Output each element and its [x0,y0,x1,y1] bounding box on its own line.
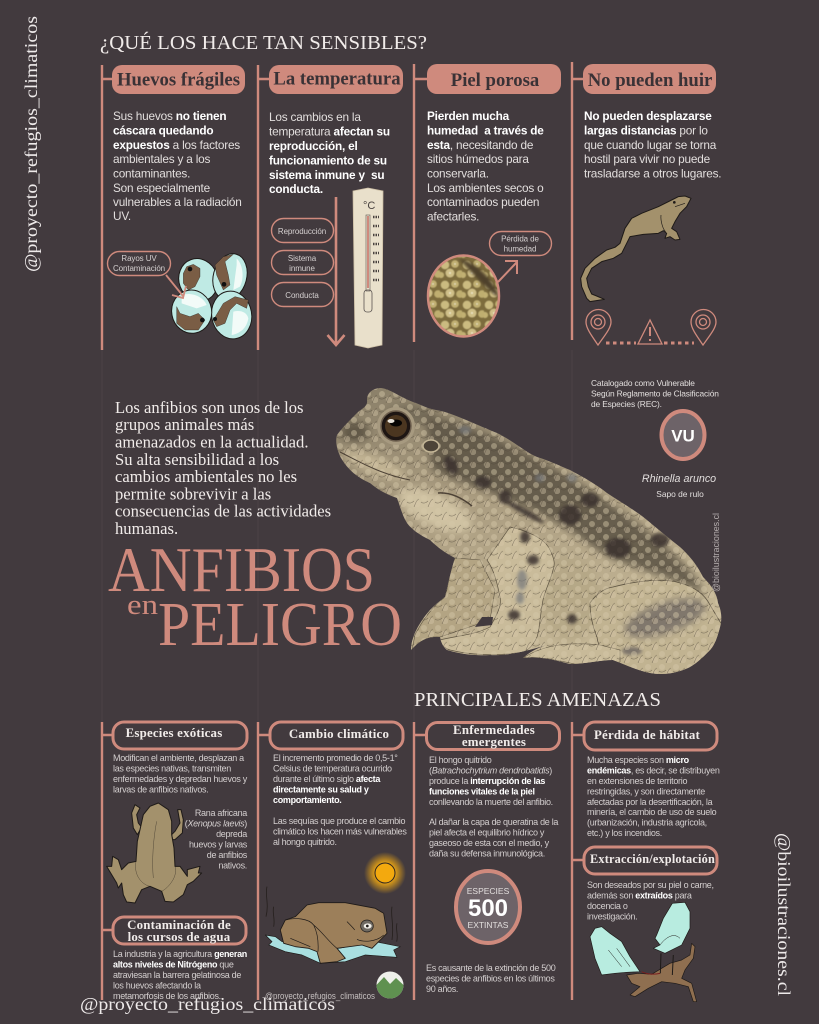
text: extracción: investigación. [587,912,637,922]
text: piel: conservarla. [427,166,489,180]
label: reproducción [272,218,334,242]
text: huevos: Son especialmente [113,181,211,195]
text: hongo quitrido: funciones vitales de la piel [429,786,535,796]
text: pérdida de hábitat [587,755,720,838]
illustration: sapo sobre charco seco [265,887,400,963]
arrow: pérdida [498,261,517,282]
heading: enfermedades emergentes: Enfermedades [453,723,535,737]
text: temperatura: Los cambios en la [269,110,361,124]
icon: termómetro: °C [363,200,375,212]
toad warts [330,380,730,680]
text: huir: hostil para vivir no puede [584,152,711,166]
icon: ruta bloqueada [586,310,716,345]
label: pérdida de humedad [490,232,552,256]
text: rana africana: nativos. [218,860,247,870]
heading: la temperatura: La temperatura [273,68,401,90]
text: huir: que cuando lugar se torna [584,138,717,152]
text: extinción: Es causante de la extinción de 500 [426,963,556,973]
icon: rana saltando [581,196,691,302]
text: piel: afectarles. [427,210,479,224]
badge: 500 especies extintas: EXTINTAS [468,920,509,930]
label: rayos UV contaminación: Contaminación [113,264,165,273]
text: hongo quitrido [429,755,558,858]
panel: huevos frágiles [102,65,256,350]
text: piel: sitios húmedos para [427,152,529,166]
title: anfibios en peligro: ANFIBIOS [108,534,375,605]
text: temperatura: reproducción, el [269,139,358,153]
text: huevos: ambientales y a los [113,152,210,166]
text: extinción: 90 años. [426,984,458,994]
title: anfibios en peligro: en [127,589,159,621]
text: huevos: Sus huevos no tienen [113,109,226,123]
text: cambio climático: climático los hacen más vulnerables [273,826,407,836]
text: temperatura: conducta. [269,182,323,196]
heading: contaminación de los cursos de agua [113,917,246,944]
text: extracción: docencia o [587,901,628,911]
text: rana africana: (Xenopus laevis) [185,818,247,828]
watermark: proyecto vertical: @proyecto_refugios_climaticos [21,16,41,272]
badge: 500 especies extintas: 500 [468,895,508,922]
text: huevos: vulnerables a la radiación [113,195,242,209]
panel: pérdida de hábitat y extracción [572,722,720,1002]
text: especies exóticas: Modifican el ambiente, desplazan a [113,753,244,763]
mouth and parotoid details [340,452,472,506]
heading: contaminación de los cursos de agua: Contaminación de [127,918,231,932]
text: piel: Los ambientes secos o [427,181,544,195]
watermark: proyecto inferior: @proyecto_refugios_climaticos [80,994,335,1014]
title: anfibios en peligro [108,534,402,659]
text: cambio climático: al hongo quitrido. [273,837,337,847]
text: cambio climático: Celsius de temperatura ocurrido [273,764,392,774]
heading: no pueden huir: No pueden huir [588,70,712,91]
heading: enfermedades emergentes [426,722,560,750]
text: temperatura: temperatura afectan su [269,124,390,138]
heading: extracción/explotación: Extracción/explotación [590,852,715,866]
text: contaminación [113,949,247,1001]
text: cambio climático: durante el último siglo afecta [273,774,381,784]
text: pérdida de hábitat: restringidas, y son directamente [587,786,705,796]
heading: especies exóticas: Especies exóticas [126,726,222,740]
text: rana africana: depreda [216,829,247,839]
text: pérdida de hábitat: Mucha especies son micro [587,755,690,765]
panel: enfermedades emergentes [414,722,560,1000]
badge: 500 especies extintas: ESPECIES [467,886,510,896]
panel: especies exóticas y contaminación [102,722,248,1001]
text: extinción [426,963,556,994]
text: huevos: UV. [113,209,131,223]
label: rayos UV contaminación: Rayos UV [121,254,157,263]
heading: no pueden huir [583,64,716,94]
badge: VU [662,411,704,459]
text: rana africana [185,808,248,870]
logo: refugios climáticos [376,972,404,999]
text: extracción [587,880,714,922]
text: introducción: consecuencias de las actividades [115,502,331,520]
panel: piel porosa [414,64,561,342]
panel: no pueden huir [572,62,721,345]
label: pérdida de humedad: humedad [504,244,536,254]
heading: huevos frágiles [112,65,245,94]
text: extracción: Son deseados por su piel o carne, [587,880,714,890]
text: contaminación: La industria y la agricultura generan [113,949,247,959]
text: introducción [115,398,331,538]
text: introducción: humanas. [115,519,178,538]
heading: pérdida de hábitat: Pérdida de hábitat [594,728,701,742]
text: temperatura: funcionamiento de su [269,154,387,168]
text: piel: contaminados pueden [427,195,539,209]
heading: extracción/explotación [584,847,717,874]
label: conducta [272,282,334,306]
text: pérdida de hábitat: en extensiones de territorio [587,776,687,786]
text: rana africana: de anfibios [207,850,248,860]
text: contaminación: altos niveles de Nitrógeno que [113,960,234,970]
heading: cambio climático [270,722,403,749]
text: temperatura: sistema inmune y su [269,168,384,182]
text: huir [584,109,721,180]
text: cambio climático: directamente su salud y [273,784,369,794]
arrow: descenso [328,197,344,345]
illustration: sapo Rhinella arunco [330,380,730,680]
text: cambio climático: Las sequías que produce el cambio [273,816,405,826]
text: nombre de especie: Rhinella arunco [642,473,716,485]
panel: cambio climático [258,722,407,1001]
text: piel: humedad a través de [427,124,544,138]
heading: cambio climático: Cambio climático [289,727,389,741]
label: reproducción: Reproducción [278,227,326,236]
text: cambio climático [273,753,407,847]
text: piel [427,109,544,224]
icon: sol [364,852,406,894]
text: especies exóticas: enfermedades y depredan huevos y [113,774,248,784]
text: pérdida de hábitat: afectadas por la desertificación, la [587,797,713,807]
back foreleg [412,558,495,650]
label: rayos UV contaminación [108,252,170,276]
text: temperatura [269,110,390,196]
text: introducción: Su alta sensibilidad a los [115,450,279,469]
text: estado de conservación: Según Reglamento de Clasificación [591,388,719,398]
text: estado de conservación [591,378,719,409]
illustration: manos con guantes y anfibio [590,902,697,1002]
text: huevos [113,109,242,223]
icon: huevos [168,250,256,342]
text: pérdida de hábitat: etc.) y los incendios. [587,828,662,838]
credit: bioilustraciones: @bioilustraciones.cl [711,513,721,592]
text: contaminación: los huevos afectando la [113,980,201,990]
label: sistema inmune: Sistema [288,254,317,263]
text: especies exóticas: las especies nativas, transmiten [113,764,231,774]
text: especies exóticas [113,753,248,794]
text: cambio climático: comportamiento. [273,795,342,805]
label: pérdida de humedad: Pérdida de [501,234,539,244]
text: hongo quitrido: piel afecta el equilibrio hídrico y [429,828,545,838]
text: piel: esta, necesitando de [427,138,534,152]
arrow: rayos UV a huevos [166,275,186,298]
text: nombre de especie [642,473,716,499]
heading: la temperatura [269,65,403,94]
front arm [440,527,554,655]
icon: rana africana [107,803,202,903]
icon: termómetro [353,188,383,348]
text: introducción: amenazados en la actualidad. [115,432,308,452]
text: extracción: además son extraídos para [587,890,692,900]
heading: contaminación de los cursos de agua: los cursos de agua [128,930,231,944]
text: contaminación: metamorfosis de los anfibios.. [113,991,223,1001]
text: contaminación: atraviesan la barrera gelatinosa de [113,970,241,980]
text: hongo quitrido: (Batrachochytrium dendrobatidis) [429,766,552,776]
text: nombre de especie: Sapo de rulo [656,489,704,499]
text: especies exóticas: larvas de anfibios nativos. [113,784,208,794]
text: pérdida de hábitat: (urbanización, industria agrícola, [587,818,707,828]
rear foot [523,644,620,664]
badge: 500 especies extintas [456,871,520,943]
rear thigh and leg [590,580,725,680]
text: huevos: expuestos a los factores [113,138,240,152]
text: pérdida de hábitat: minería, el cambio de uso de suelo [587,807,717,817]
text: introducción: grupos animales más [115,415,254,434]
heading: enfermedades emergentes: emergentes [462,735,526,749]
text: rana africana: Rana africana [195,808,247,818]
text: pérdida de hábitat: endémicas, es decir, se distribuyen [587,766,720,776]
heading: piel porosa [427,64,561,94]
text: estado de conservación: de Especies (REC). [591,399,662,409]
heading: huevos frágiles: Huevos frágiles [117,70,240,90]
text: rana africana: huevos y larvas [189,840,248,850]
heading: piel porosa: Piel porosa [451,70,540,91]
text: hongo quitrido: produce la interrupción de las [429,776,545,786]
text: hongo quitrido: Al dañar la capa de queratina de la [429,817,558,827]
label: sistema inmune [272,250,334,274]
panel: la temperatura [258,65,403,350]
text: estado de conservación: Catalogado como Vulnerable [591,378,695,388]
text: huir: largas distancias por lo [584,124,708,138]
icon: piel porosa [425,252,503,340]
text: introducción: Los anfibios son unos de los [115,398,304,417]
eye [377,407,415,445]
title: qué los hace tan sensibles: ¿QUÉ LOS HACE TAN SENSIBLES? [100,31,427,54]
credit: proyecto refugios climáticos pequeño: @proyecto_refugios_climaticos [265,991,375,1001]
text: huir: trasladarse a otros lugares. [584,166,721,180]
text: introducción: permite sobrevivir a las [115,484,271,504]
text: huevos: cáscara quedando [113,124,213,138]
text: hongo quitrido: El hongo quitrido [429,755,492,765]
heading: especies exóticas [113,722,247,749]
text: huir: No pueden desplazarse [584,109,712,123]
text: extinción: especies de anfibios en los últimos [426,974,555,984]
text: introducción: cambios ambientales no les [115,467,297,486]
heading: principales amenazas: PRINCIPALES AMENAZAS [414,689,661,711]
text: piel: Pierden mucha [427,109,510,123]
text: cambio climático: El incremento promedio de 0,5-1° [273,753,398,763]
watermark: bioilustraciones vertical: @bioilustraciones.cl [774,833,794,996]
title: anfibios en peligro: PELIGRO [158,591,402,659]
label: conducta: Conducta [285,291,319,300]
text: hongo quitrido: daña su defensa inmunológica. [429,848,545,858]
heading: pérdida de hábitat [584,722,717,750]
text: hongo quitrido: conllevando la muerte del anfibio. [429,797,553,807]
label: sistema inmune: inmune [289,264,315,273]
badge: VU: VU [671,426,695,446]
text: huevos: contaminantes. [113,166,190,180]
text: hongo quitrido: gaseoso de esta con el medio, y [429,838,550,848]
